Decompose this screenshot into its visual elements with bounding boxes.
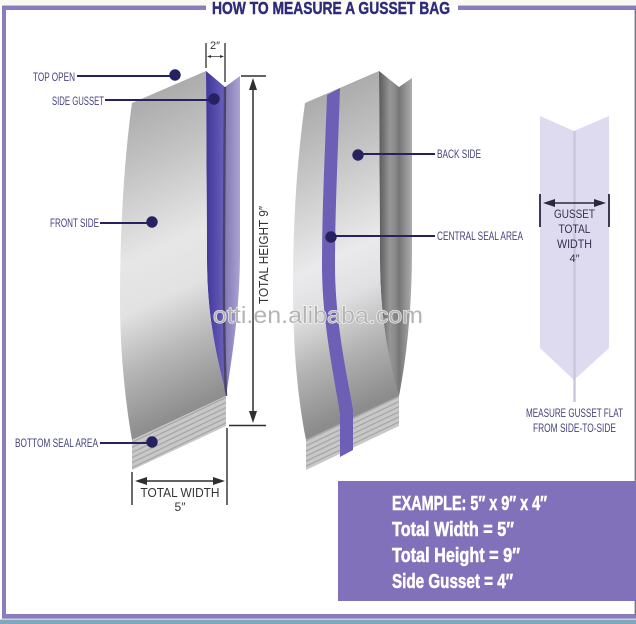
callout: front side bbox=[50, 216, 158, 230]
example text: EXAMPLE: 5″ x 9″ x 4″ bbox=[392, 493, 547, 515]
gusset caption bbox=[526, 408, 623, 435]
left bag gusset right panel bbox=[224, 76, 240, 396]
example text: Side Gusset = 4″ bbox=[392, 571, 513, 593]
gusset width label: TOTAL bbox=[558, 222, 591, 236]
callout: central seal area bbox=[325, 231, 523, 243]
callout: side gusset: SIDE GUSSET bbox=[52, 96, 104, 108]
example text: Total Width = 5″ bbox=[392, 519, 514, 541]
example text bbox=[392, 493, 547, 593]
dimension: total height bbox=[229, 76, 271, 426]
bottom strip bbox=[0, 620, 636, 624]
top cream band bbox=[0, 0, 636, 5]
example text: Total Height = 9″ bbox=[392, 545, 520, 567]
right bag gusset panels bbox=[379, 71, 399, 396]
left bag gusset blue panel bbox=[206, 71, 226, 396]
gusset width label: GUSSET bbox=[554, 207, 596, 221]
left bag front panel bbox=[120, 71, 226, 440]
dimension: 2 inch gusset: 2″ bbox=[210, 40, 220, 52]
callout: central seal area: CENTRAL SEAL AREA bbox=[437, 231, 523, 243]
callout: top open bbox=[33, 69, 181, 84]
dimension: total width: TOTAL WIDTH bbox=[140, 485, 220, 500]
left bag bottom seal bbox=[132, 396, 226, 470]
dimension: total width bbox=[132, 428, 227, 514]
callout: top open: TOP OPEN bbox=[33, 72, 75, 84]
callout: back side: BACK SIDE bbox=[437, 149, 481, 161]
dimension: total height: TOTAL HEIGHT 9″ bbox=[256, 206, 271, 304]
callout: front side: FRONT SIDE bbox=[50, 218, 99, 230]
watermark: otti.en.alibaba.com bbox=[213, 302, 423, 328]
right bag illustration bbox=[293, 71, 412, 470]
gusset flat shape bbox=[540, 116, 609, 380]
gusset center fold and stem bbox=[573, 131, 576, 402]
left bag gusset fold bbox=[224, 87, 226, 396]
gusset flat diagram bbox=[526, 116, 623, 435]
callout: bottom seal area: BOTTOM SEAL AREA bbox=[15, 438, 98, 450]
central seal stripe bbox=[322, 88, 353, 457]
right bag bottom seal bbox=[306, 396, 399, 470]
gusset width arrow bbox=[540, 194, 609, 227]
left bag illustration bbox=[120, 71, 240, 470]
example panel bbox=[338, 481, 636, 601]
gusset width label: WIDTH bbox=[557, 237, 592, 251]
callout: side gusset bbox=[52, 93, 220, 108]
dimension: 2 inch gusset bbox=[206, 40, 225, 82]
right bag back panel bbox=[293, 71, 399, 440]
dimension: total width: 5″ bbox=[175, 500, 186, 514]
callout: back side bbox=[352, 149, 481, 161]
gusset width label: 4″ bbox=[569, 253, 580, 265]
gusset width label bbox=[554, 207, 596, 265]
